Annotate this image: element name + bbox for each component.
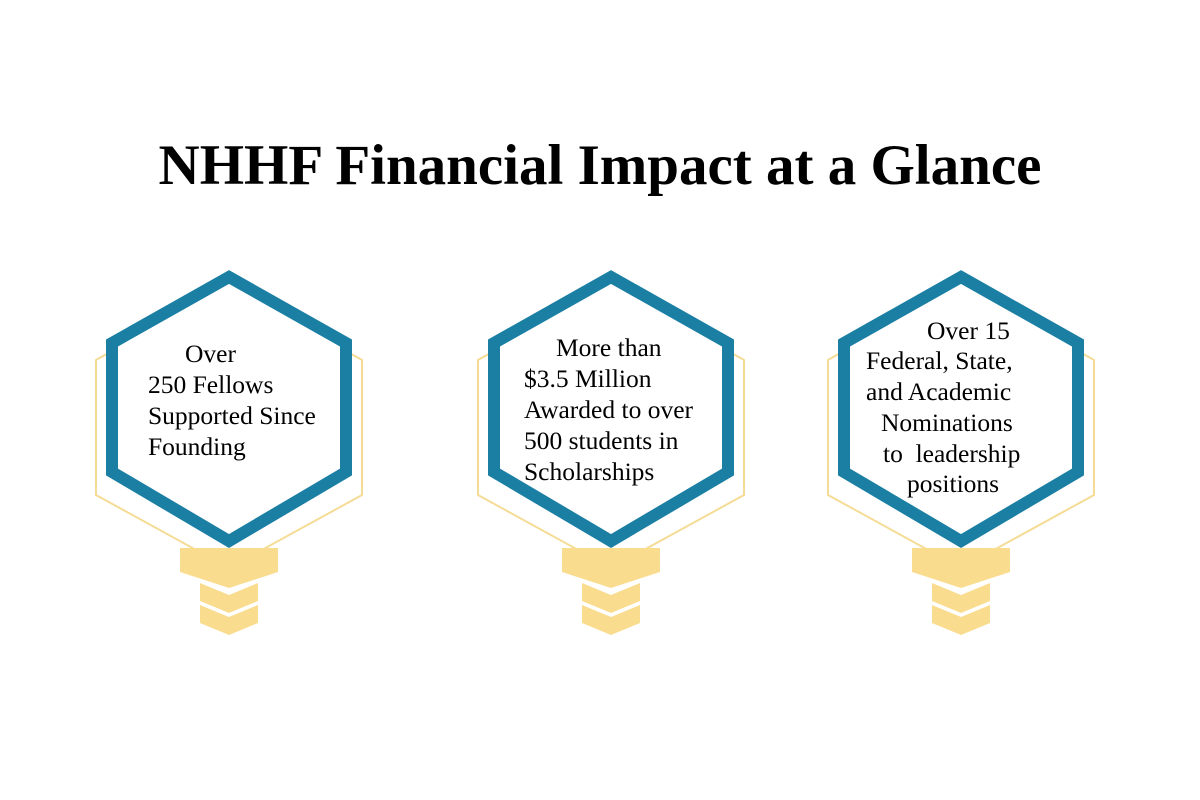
text: scholarships: More than bbox=[556, 333, 662, 362]
panel: scholarships bbox=[478, 277, 744, 635]
panel: nominations bbox=[828, 277, 1094, 635]
text: scholarships: Awarded to over bbox=[524, 395, 694, 424]
text: nominations: Federal, State, bbox=[866, 346, 1013, 375]
text: nominations: to leadership bbox=[883, 439, 1020, 468]
text: nominations: and Academic bbox=[866, 377, 1011, 406]
text: fellows: Over bbox=[185, 339, 236, 368]
text: scholarships: 500 students in bbox=[524, 426, 679, 455]
panel: fellows bbox=[96, 277, 362, 635]
text: scholarships: $3.5 Million bbox=[524, 364, 652, 393]
text: fellows: 250 Fellows bbox=[148, 370, 273, 399]
text: fellows: Founding bbox=[148, 432, 246, 461]
text: scholarships: Scholarships bbox=[524, 457, 654, 486]
text: nominations: positions bbox=[907, 469, 999, 498]
text: fellows: Supported Since bbox=[148, 401, 316, 430]
text: nominations: Over 15 bbox=[927, 316, 1010, 345]
title: NHHF Financial Impact at a Glance bbox=[159, 134, 1041, 197]
text: nominations: Nominations bbox=[881, 408, 1013, 437]
